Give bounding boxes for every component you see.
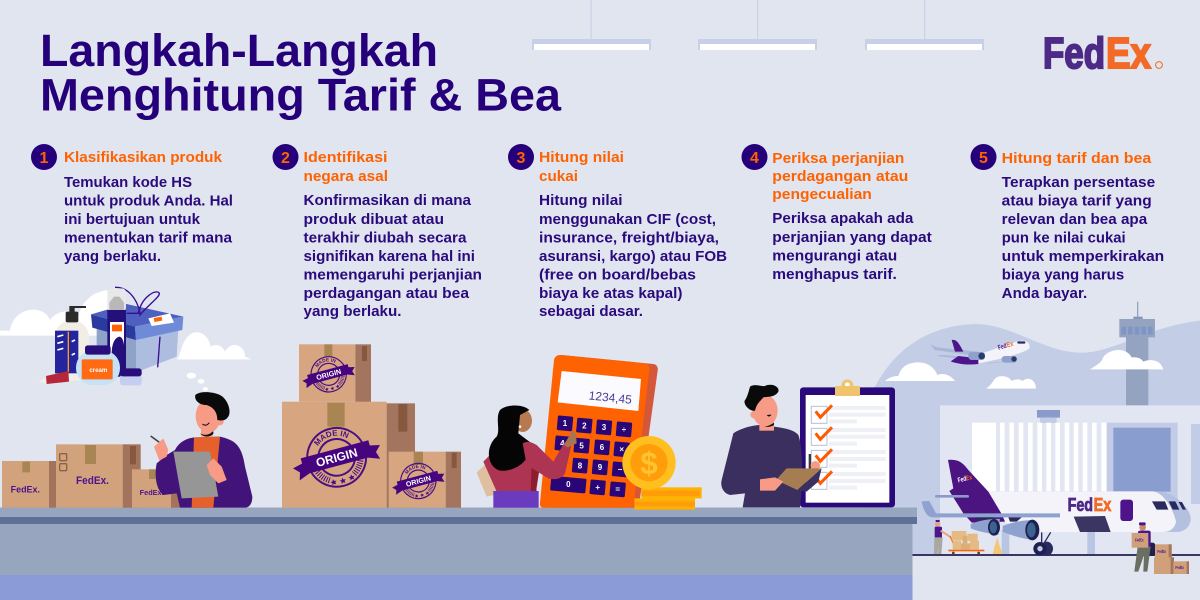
- gift box: [91, 287, 183, 377]
- body 2: yang berlaku.: [304, 303, 402, 320]
- stamp big: ORIGIN: [314, 445, 359, 470]
- thought bubbles: [187, 373, 208, 391]
- calculator: =: [615, 485, 620, 494]
- heading 5: Hitung tarif dan bea: [1002, 150, 1152, 167]
- small right box: [388, 452, 461, 508]
- flying plane: Fed: [997, 343, 1008, 352]
- body 5: Terapkan persentase: [1002, 174, 1155, 191]
- worker with boxes: FedEx: [1157, 549, 1166, 554]
- spray can: [107, 288, 126, 377]
- body 1: ini bertujuan untuk: [64, 211, 201, 228]
- coins: $: [640, 446, 658, 481]
- heading 3: Hitung nilai: [539, 149, 624, 166]
- man with clipboard: [721, 385, 822, 507]
- body 2: terakhir diubah secara: [304, 230, 467, 246]
- step 1: [31, 144, 233, 265]
- body 2: perdagangan atau bea: [304, 285, 470, 302]
- calculator: −: [618, 465, 623, 474]
- heading 4: perdagangan atau: [772, 168, 908, 185]
- worker with boxes: [1132, 522, 1189, 574]
- body 1: Temukan kode HS: [64, 174, 192, 191]
- body 4: perjanjian yang dapat: [772, 229, 932, 246]
- heading 4: Periksa perjanjian: [772, 150, 904, 167]
- number badge 3: [508, 144, 534, 170]
- calculator screen: 1234,45: [588, 388, 633, 407]
- body 3: (free on board/bebas: [539, 266, 696, 284]
- coins: [622, 436, 702, 510]
- box 1: FedEx.: [11, 485, 40, 495]
- body 5: [1002, 174, 1164, 302]
- body 1: [64, 174, 233, 265]
- hills: [870, 321, 1200, 555]
- illustration: origin boxes, woman and calculator: [282, 344, 702, 510]
- heading 4: pengecualian: [772, 186, 872, 203]
- number badge 2: [272, 144, 298, 170]
- traffic cone: [993, 537, 1003, 554]
- FedEx logo: Ex: [1106, 29, 1151, 78]
- body 4: menghapus tarif.: [772, 266, 897, 283]
- heading 2: negara asal: [304, 168, 388, 185]
- body 2: produk dibuat atau: [304, 211, 444, 228]
- calculator keys: [550, 415, 632, 497]
- heading 1: Klasifikasikan produk: [64, 149, 223, 166]
- calculator: 5: [579, 441, 584, 450]
- body 4: mengurangi atau: [772, 248, 897, 264]
- stamp big: [293, 426, 380, 488]
- small jar: [120, 368, 142, 385]
- cream jar: [76, 345, 120, 385]
- body 1: untuk produk Anda. Hal: [64, 192, 233, 210]
- landing gear: [1042, 532, 1051, 543]
- body 3: [539, 192, 727, 320]
- control tower: [1119, 302, 1155, 407]
- number badge 1: [31, 144, 57, 170]
- calculator: 6: [600, 443, 605, 452]
- body 3: Hitung nilai: [539, 192, 622, 209]
- step 3: [508, 144, 727, 320]
- clipboard: [800, 379, 895, 507]
- calculator screen: [558, 371, 641, 411]
- pump bottle: [55, 306, 89, 382]
- calculator: [540, 355, 658, 508]
- body 3: insurance, freight/biaya,: [539, 230, 719, 246]
- box 1: [2, 461, 56, 508]
- cream jar: cream: [89, 367, 108, 374]
- box 3: [132, 469, 181, 508]
- body 1: yang berlaku.: [64, 248, 161, 265]
- fuselage logo: Fed: [1068, 494, 1093, 515]
- body 3: sebagai dasar.: [539, 303, 643, 320]
- calculator: ×: [619, 445, 624, 454]
- title: [40, 25, 562, 120]
- tail fin: [948, 460, 1005, 523]
- stamp medium: ORIGIN: [405, 473, 432, 489]
- stamp medium: MADE IN: [404, 464, 426, 474]
- calculator: +: [595, 483, 600, 492]
- number badge 3: 3: [517, 150, 526, 167]
- worker with cart: [934, 520, 984, 554]
- stamp big: MADE IN: [314, 430, 349, 446]
- engines: [971, 519, 1000, 535]
- box 3: FedEx.: [140, 488, 164, 497]
- illustration: checklist and man: [721, 379, 895, 507]
- fuselage logo: Ex: [1094, 494, 1112, 515]
- counter: [0, 508, 917, 600]
- calculator: 0: [566, 480, 571, 489]
- FedEx logo: [1043, 29, 1162, 78]
- box 2: FedEx.: [76, 475, 109, 487]
- clouds: [885, 350, 1163, 389]
- man with tablet: [151, 392, 252, 508]
- body 5: relevan dan bea apa: [1002, 211, 1148, 228]
- heading 2: Identifikasi: [304, 149, 388, 166]
- number badge 4: [742, 144, 768, 170]
- calculator: 2: [582, 421, 587, 430]
- heading 2: [304, 149, 388, 185]
- body 5: pun ke nilai cukai: [1002, 230, 1126, 246]
- stamp small: [302, 356, 355, 393]
- flying plane: Ex: [1006, 341, 1014, 349]
- heading 4: [772, 150, 908, 203]
- flying plane: [930, 340, 1030, 365]
- body 2: signifikan karena hal ini: [304, 248, 475, 265]
- calculator: 9: [598, 463, 603, 472]
- clouds: [0, 290, 252, 359]
- calculator: 1: [563, 419, 568, 428]
- body 5: biaya yang harus: [1002, 266, 1124, 284]
- box 2: [56, 444, 141, 508]
- calculator: 8: [578, 461, 583, 470]
- body 5: atau biaya tarif yang: [1002, 192, 1152, 210]
- ceiling lamps: [532, 0, 984, 50]
- stamp medium: [392, 462, 444, 500]
- illustration: products and man with tablet: [0, 287, 252, 508]
- tube: [38, 371, 69, 384]
- body 5: Anda bayar.: [1002, 285, 1087, 302]
- title: Langkah-Langkah: [40, 25, 438, 76]
- heading 3: cukai: [539, 168, 578, 185]
- number badge 5: 5: [979, 150, 988, 167]
- step 5: [970, 144, 1164, 302]
- terminal building: [940, 405, 1200, 555]
- body 4: [772, 210, 932, 283]
- body 2: memengaruhi perjanjian: [304, 266, 482, 284]
- body 4: Periksa apakah ada: [772, 210, 914, 227]
- calculator: ÷: [622, 425, 627, 434]
- number badge 2: 2: [281, 150, 290, 167]
- stamp small: ORIGIN: [315, 367, 342, 382]
- worker with boxes: FedEx: [1135, 538, 1144, 543]
- body 2: [304, 192, 482, 320]
- number badge 5: [970, 144, 996, 170]
- big box: [282, 402, 415, 508]
- airport scene: [870, 302, 1200, 574]
- FedEx logo: Fed: [1043, 29, 1105, 78]
- step 4: [742, 144, 932, 283]
- body 3: asuransi, kargo) atau FOB: [539, 248, 727, 265]
- number badge 1: 1: [40, 150, 49, 167]
- body 5: untuk memperkirakan: [1002, 248, 1164, 265]
- top box: [299, 344, 371, 402]
- ground line: [912, 554, 1200, 556]
- calculator: 3: [602, 423, 607, 432]
- parked FedEx plane: Fed: [957, 476, 967, 485]
- body 3: biaya ke atas kapal): [539, 285, 683, 302]
- woman: [477, 405, 577, 508]
- worker with boxes: FedEx: [1175, 565, 1184, 570]
- parked FedEx plane: Ex: [965, 474, 973, 483]
- body 2: Konfirmasikan di mana: [304, 192, 472, 209]
- heading 3: [539, 149, 624, 185]
- calculator: 4: [560, 439, 565, 448]
- parked FedEx plane: [922, 460, 1191, 556]
- number badge 4: 4: [750, 150, 759, 167]
- step 2: [272, 144, 482, 320]
- stamp small: MADE IN: [315, 358, 336, 368]
- title: Menghitung Tarif & Bea: [40, 70, 562, 120]
- body 1: menentukan tarif mana: [64, 230, 233, 246]
- body 3: menggunakan CIF (cost,: [539, 211, 716, 228]
